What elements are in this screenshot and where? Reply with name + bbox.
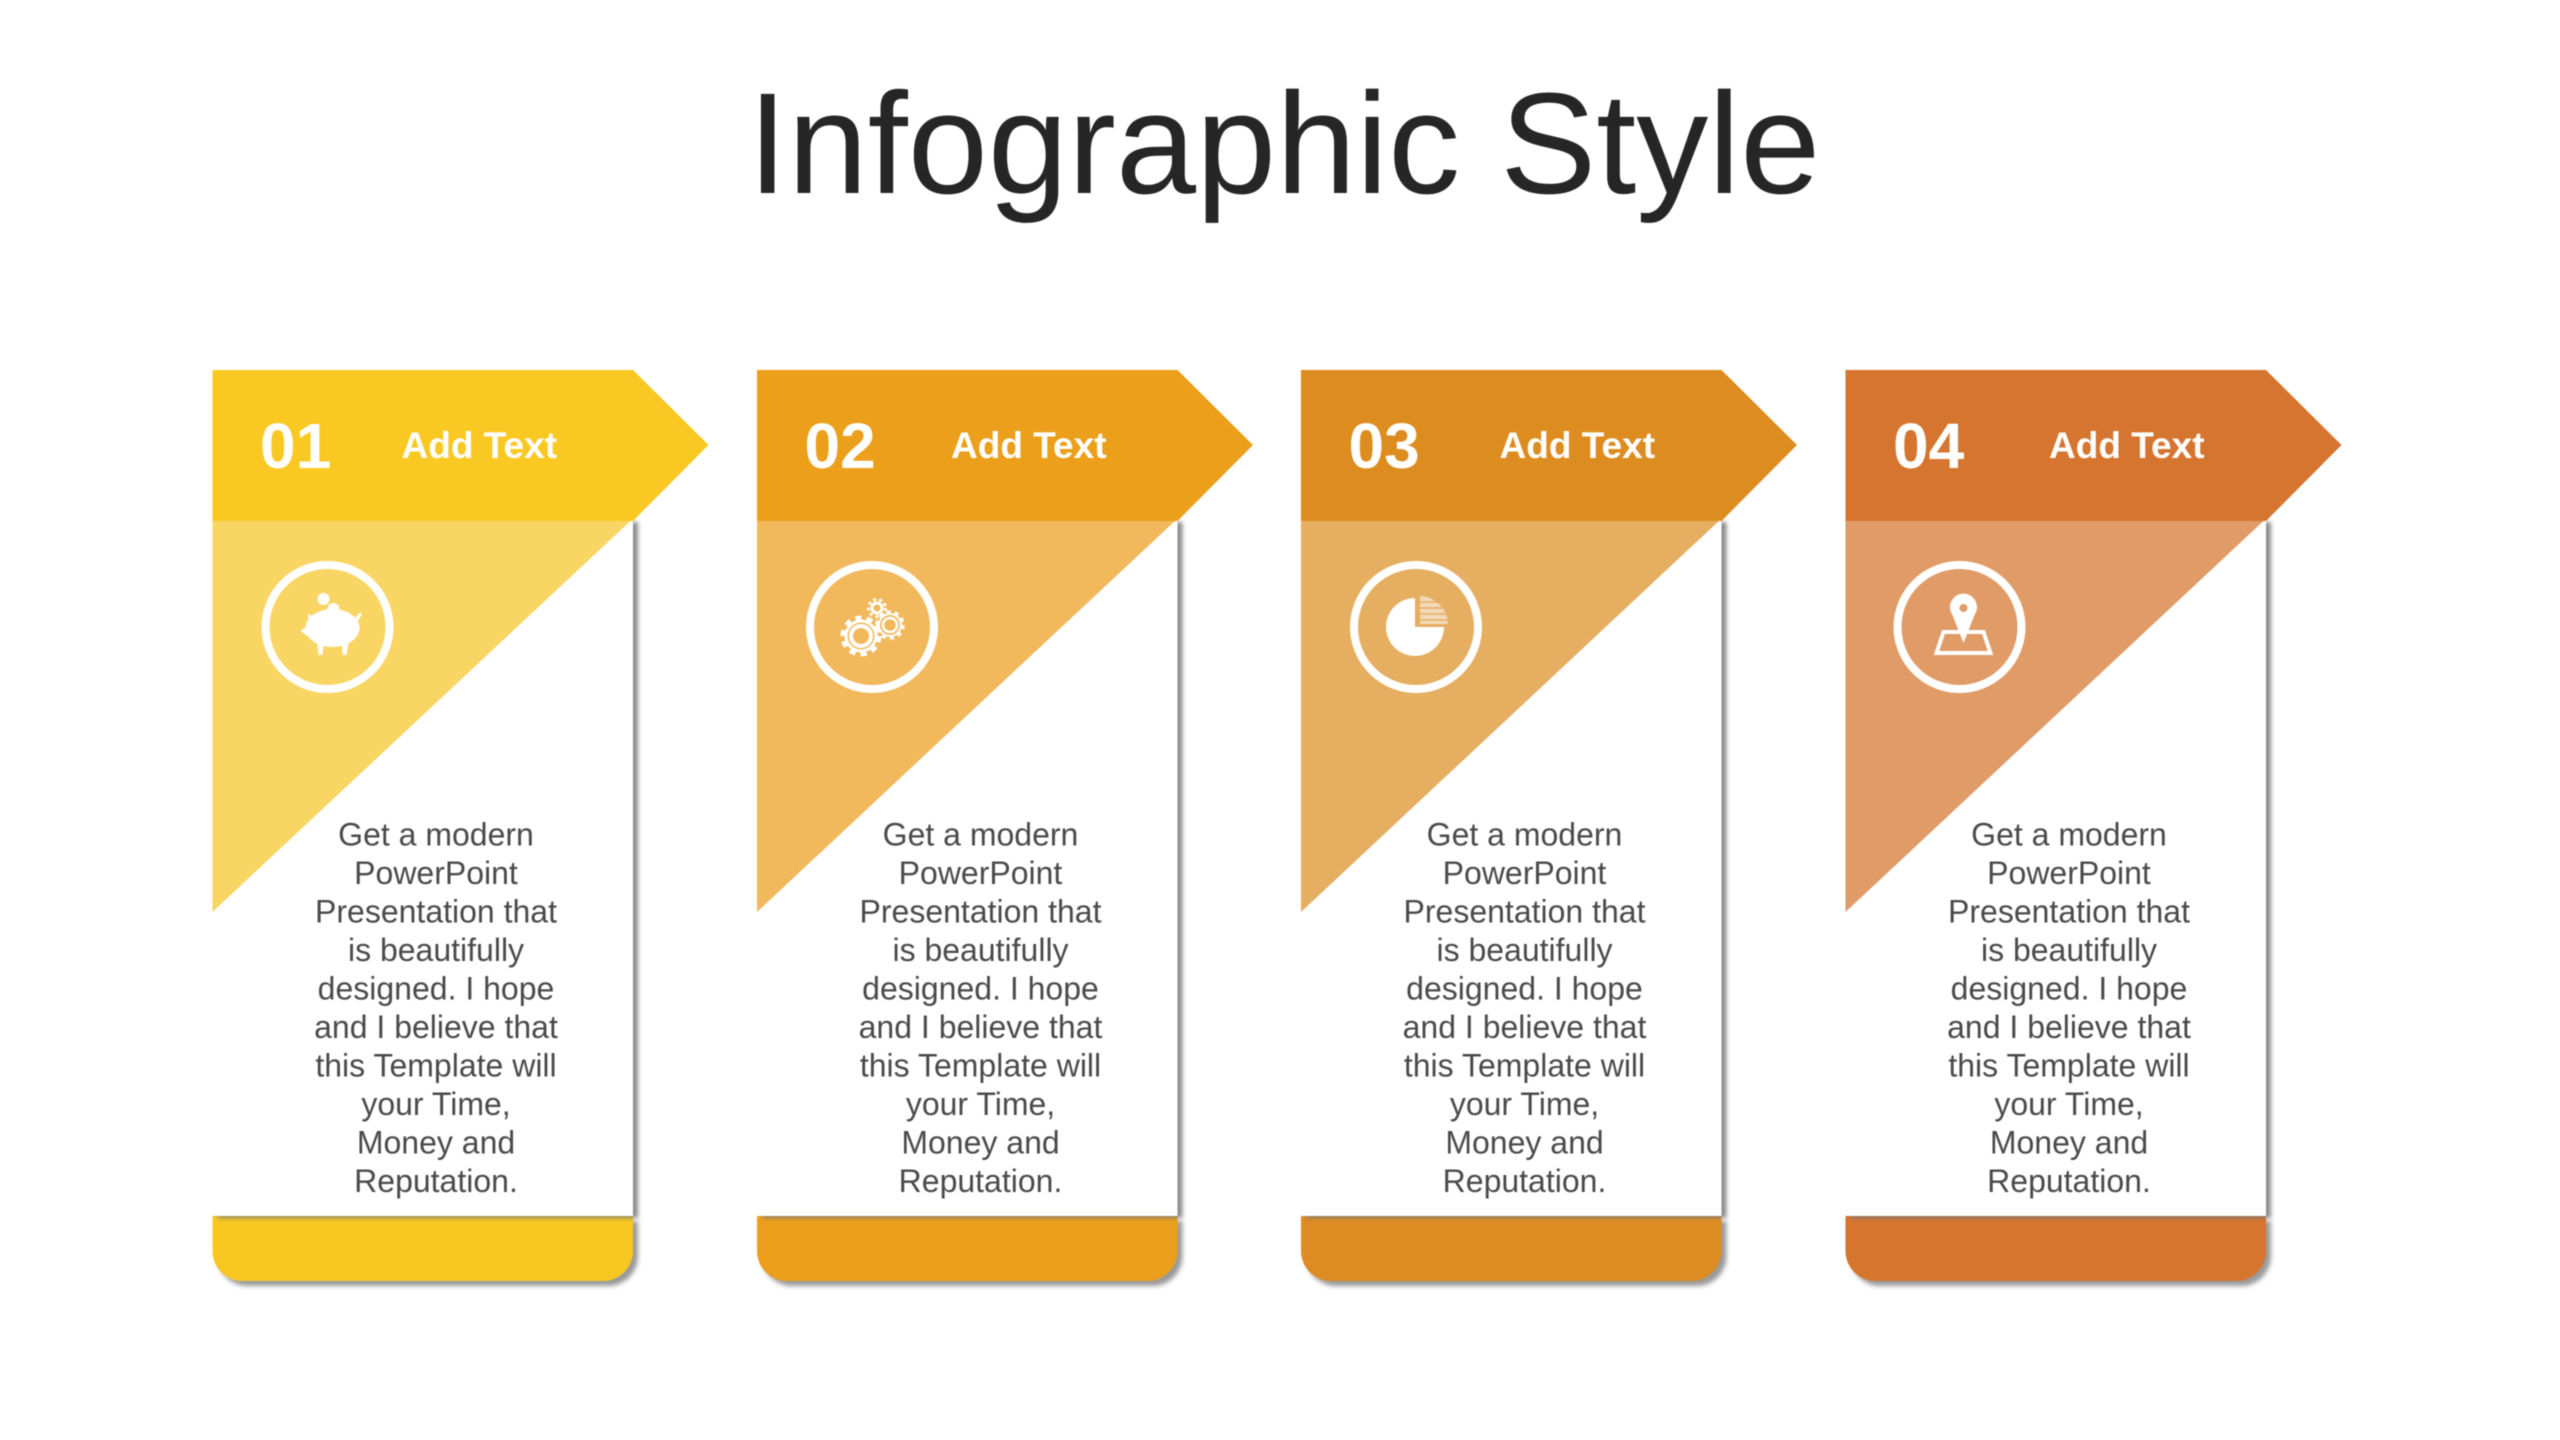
header label: Add Text	[951, 425, 1107, 466]
description text: and I believe that	[314, 1009, 558, 1045]
description text: and I believe that	[1403, 1009, 1646, 1045]
description text: Presentation that	[1948, 894, 2190, 930]
light triangle	[212, 520, 632, 912]
description text: PowerPoint	[1987, 855, 2151, 891]
description text: Get a modern	[883, 816, 1078, 852]
number: 04	[1893, 410, 1965, 482]
description text: Presentation that	[315, 894, 557, 930]
icon: pie chart	[1354, 565, 1478, 689]
bottom strip	[212, 1216, 633, 1281]
bottom strip	[1301, 1216, 1722, 1281]
description text: your Time,	[906, 1086, 1055, 1122]
number: 02	[804, 410, 876, 482]
description text: Money and	[357, 1124, 515, 1160]
description text: Reputation.	[899, 1163, 1062, 1199]
header label: Add Text	[2049, 425, 2205, 466]
bottom strip	[757, 1216, 1178, 1281]
description text: and I believe that	[1947, 1009, 2191, 1045]
description text: this Template will	[315, 1048, 557, 1084]
description text: your Time,	[361, 1086, 511, 1122]
description text: designed. I hope	[318, 970, 554, 1006]
card 1	[212, 370, 708, 1281]
description text: Money and	[901, 1124, 1060, 1160]
white body panel	[212, 520, 633, 1216]
description text: Get a modern	[1427, 816, 1622, 852]
light triangle	[1301, 520, 1720, 912]
description text: PowerPoint	[899, 855, 1062, 891]
description text: Presentation that	[1404, 894, 1646, 930]
icon: gears	[810, 565, 934, 689]
white body panel	[1301, 520, 1722, 1216]
card 4	[1846, 370, 2342, 1281]
description text: is beautifully	[892, 932, 1069, 968]
description text: designed. I hope	[862, 970, 1099, 1006]
header label: Add Text	[402, 425, 557, 466]
description text: is beautifully	[1981, 932, 2157, 968]
description text: this Template will	[1404, 1048, 1645, 1084]
description text: Get a modern	[1971, 816, 2167, 852]
description text: your Time,	[1994, 1086, 2144, 1122]
icon: piggy bank	[266, 565, 390, 689]
description text: PowerPoint	[1443, 855, 1606, 891]
header label: Add Text	[1500, 425, 1655, 466]
description text: is beautifully	[348, 932, 524, 968]
arrow header	[1301, 370, 1797, 521]
light triangle	[1846, 520, 2264, 912]
icon: map pin	[1898, 565, 2022, 689]
white body panel	[757, 520, 1178, 1216]
description text: Get a modern	[338, 816, 534, 852]
light triangle	[757, 520, 1176, 912]
card 2	[757, 370, 1253, 1281]
description text: Reputation.	[1987, 1163, 2151, 1199]
description text: Presentation that	[860, 894, 1102, 930]
description text: is beautifully	[1436, 932, 1613, 968]
description text: your Time,	[1450, 1086, 1599, 1122]
arrow header	[212, 370, 708, 521]
description text: PowerPoint	[354, 855, 518, 891]
arrow header	[757, 370, 1253, 521]
number: 03	[1348, 410, 1420, 482]
description text: this Template will	[1948, 1048, 2190, 1084]
arrow header	[1846, 370, 2342, 521]
description text: Money and	[1445, 1124, 1604, 1160]
description text: this Template will	[860, 1048, 1101, 1084]
title: Infographic Style	[748, 63, 1820, 224]
description text: and I believe that	[859, 1009, 1102, 1045]
number: 01	[260, 410, 331, 482]
description text: designed. I hope	[1406, 970, 1643, 1006]
description text: designed. I hope	[1951, 970, 2187, 1006]
description text: Money and	[1990, 1124, 2148, 1160]
description text: Reputation.	[354, 1163, 518, 1199]
description text: Reputation.	[1443, 1163, 1606, 1199]
white body panel	[1846, 520, 2266, 1216]
card 3	[1301, 370, 1797, 1281]
bottom strip	[1846, 1216, 2266, 1281]
